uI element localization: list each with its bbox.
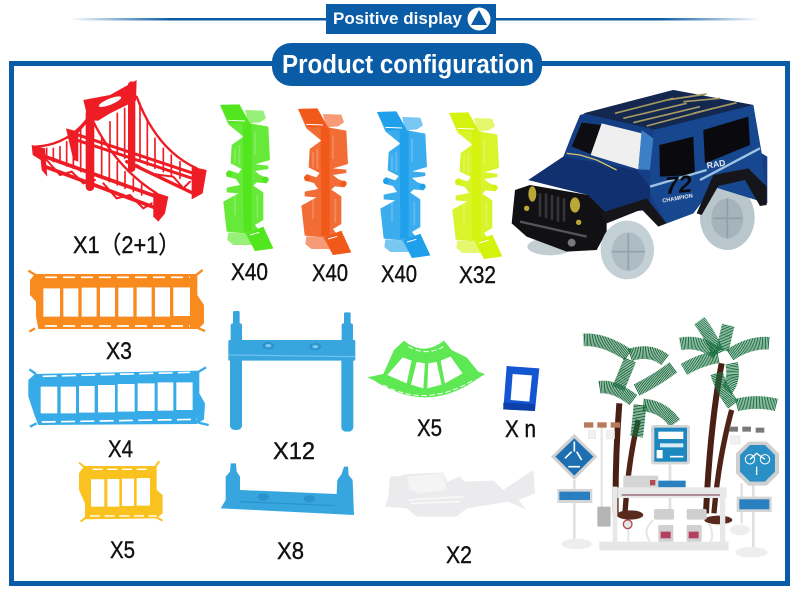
badge: positive display: [326, 4, 496, 34]
item: short blue support: [221, 463, 354, 515]
item: orange connector: [298, 108, 351, 255]
item: blue toy car: [512, 90, 767, 279]
heading: product configuration: Product configuration: [282, 51, 534, 79]
sign: street lamp left: [584, 422, 620, 527]
label: X40 blue: X40: [381, 261, 417, 288]
label: X1 (2+1): X1（2+1）: [73, 232, 180, 259]
item: blue toy car: CHAMPION: [662, 193, 693, 205]
item: blue connector: [377, 111, 430, 258]
item: green connector: [220, 104, 273, 251]
palm tree right: [680, 321, 777, 524]
item: blue toy car: 72: [664, 171, 694, 200]
label: X5 yellow: X5: [110, 537, 135, 564]
label: X4: X4: [108, 436, 133, 463]
item: blue block: [503, 366, 539, 411]
sign: pedestrian diamond: [551, 434, 597, 549]
item: yellow ramp: [79, 461, 163, 522]
header rule: [70, 18, 760, 20]
sign: parking panel: [651, 425, 690, 510]
label: X32: X32: [459, 262, 496, 289]
heading: product configuration: [272, 43, 542, 86]
item: tall blue support: [228, 311, 355, 432]
label: X8: X8: [277, 538, 304, 565]
sign: cycle octagon: [729, 427, 779, 558]
item: red bridge: [32, 80, 207, 222]
label: X40 green: X40: [231, 259, 268, 286]
item: green curved track: [367, 341, 485, 397]
sign: gas station: [599, 476, 729, 550]
label: X5 green: X5: [417, 415, 442, 442]
label: X2: X2: [446, 542, 472, 569]
item: blue ramp: [28, 367, 209, 427]
label: X3: X3: [106, 338, 132, 365]
item: blue toy car: RAD: [706, 158, 726, 171]
item: orange ramp: [28, 270, 205, 332]
label: X n: X n: [505, 416, 536, 443]
item: yellow connector: [449, 112, 502, 259]
label: X40 orange: X40: [312, 260, 348, 287]
item: white chassis: [385, 470, 535, 517]
badge: positive display: Positive display: [333, 10, 463, 28]
palm tree left: [583, 340, 675, 520]
label: X12: X12: [273, 438, 315, 465]
item: palm trees and road signs: [551, 321, 779, 558]
